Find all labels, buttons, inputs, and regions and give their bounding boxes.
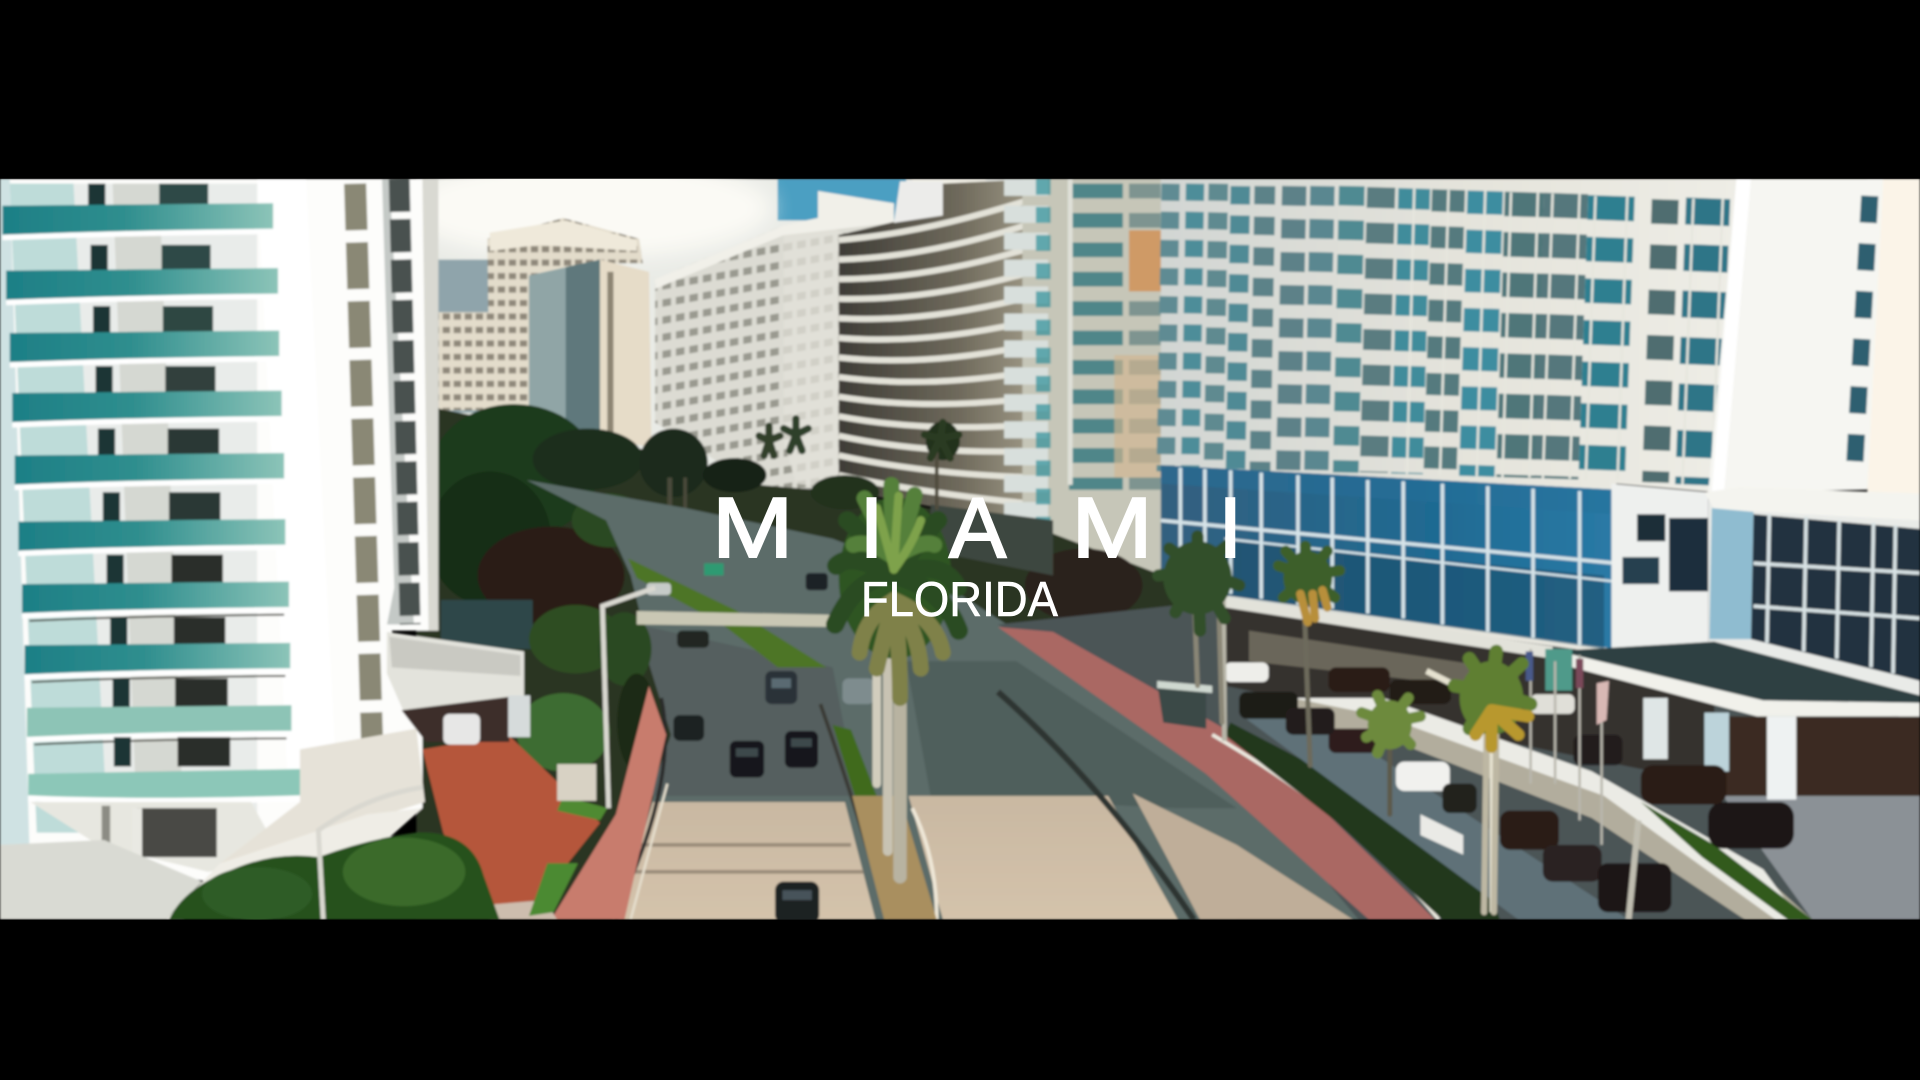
title: MIAMI [712,480,1242,576]
palm trees on the right [759,419,1531,912]
annex building with dark windows [1704,487,1920,722]
central palm tree [835,485,959,877]
roads in shade [527,480,1359,920]
street lamps [318,557,1638,920]
hotel entrance canopy [1545,642,1920,920]
title: MIAMI: I [1218,480,1242,576]
road curbs and lane markings [612,692,1194,920]
white tower block [1708,179,1883,492]
tower side window strips [355,179,410,747]
cars on the street [647,573,874,923]
teal and tan curved tower [1022,179,1163,583]
left apartment tower body [0,179,438,882]
aerial street photo scene [0,157,1920,923]
porte cochere and car [387,632,530,744]
retaining wall ramp [1286,698,1812,920]
parked cars [1224,662,1794,912]
title: MIAMI: M [1071,481,1153,576]
dark trees and lower building base beside road [517,504,1142,771]
title: MIAMI: M [712,481,793,576]
right sidewalk, hedge and parking lane [998,604,1812,920]
sunlit road surfaces [618,793,1353,920]
subtitle: FLORIDA: FLORIDA [861,573,1058,627]
title: MIAMI: I [860,480,883,576]
curved balconies [2,184,302,872]
flags and poles [1526,649,1609,845]
hotel ground floor and white canopy edge [1224,596,1714,784]
palms, trees and low vegetation behind the street [429,404,960,649]
median strips and crossing [628,558,937,920]
foreground bush [169,833,500,921]
pink sidewalk left and brick driveway [422,686,666,920]
distant towers [433,218,651,447]
blue glass lower floors of the hotel [1161,465,1713,667]
main hotel facade with window columns [1161,179,1745,655]
striped curved apartment block [837,179,1024,516]
tower base and terrace [0,729,425,920]
sky with clouds [404,157,1920,497]
bus shelter and white barrier [1157,681,1463,855]
dark ground vegetation base [416,404,1237,920]
long white apartment block [655,191,894,490]
title: MIAMI: A [949,480,1006,576]
